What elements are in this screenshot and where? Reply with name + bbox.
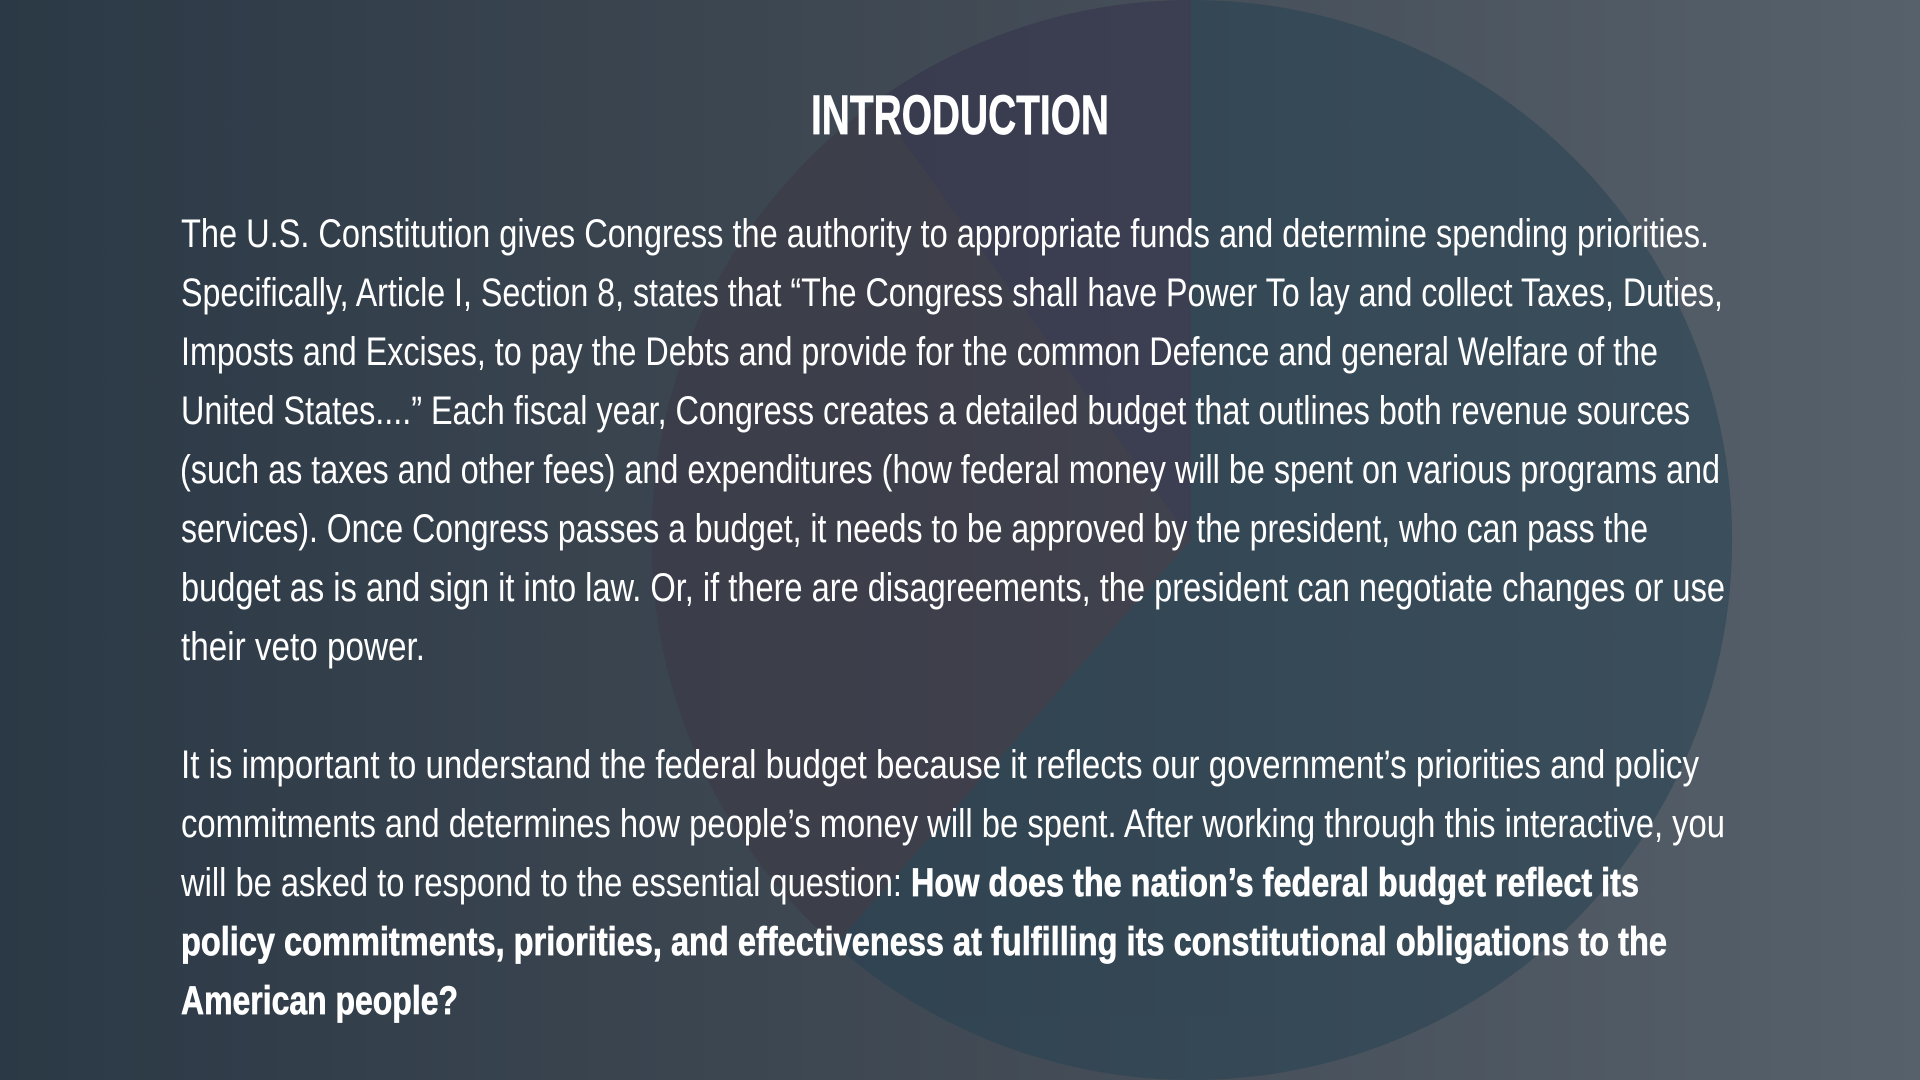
paragraph: essential question: American people? xyxy=(181,979,458,1023)
paragraph: essential question xyxy=(180,743,1725,1023)
pie slice: brown xyxy=(652,102,1191,945)
pie slice: teal xyxy=(835,0,1732,1080)
pie chart watermark xyxy=(652,0,1732,1080)
pie slice: purple xyxy=(875,0,1191,540)
paragraph: essential question: How does the nation’s federal budget reflect its xyxy=(911,861,1639,905)
paragraph: constitutional authority xyxy=(180,212,1725,669)
title: INTRODUCTION xyxy=(811,83,1109,146)
paragraph: essential question: will be asked to respond to the essential question: xyxy=(180,861,902,905)
paragraph: constitutional authority: their veto power. xyxy=(181,625,425,669)
